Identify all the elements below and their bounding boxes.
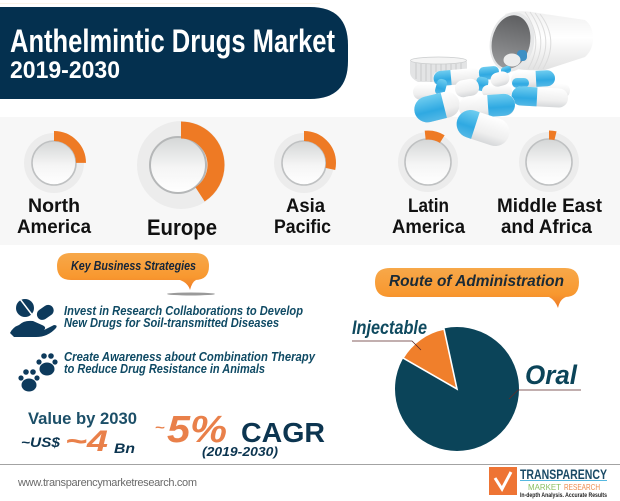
donut: Europe xyxy=(137,121,225,209)
donut: Latin America xyxy=(398,132,458,192)
label: North America: North xyxy=(28,196,80,217)
label: Injectable: Injectable xyxy=(352,318,427,339)
bottle xyxy=(484,8,593,76)
logo wordmark: MARKET xyxy=(528,482,561,492)
label: Asia Pacific xyxy=(274,196,331,238)
strategy text 2 xyxy=(64,350,316,376)
stat: value by 2030 xyxy=(21,409,137,458)
callout: Route of Administration xyxy=(375,268,579,308)
stat: value by 2030: ~4 xyxy=(65,425,108,458)
callout: Route of Administration: Route of Administration xyxy=(389,273,564,290)
strategy text 1: New Drugs for Soil-transmitted Diseases xyxy=(64,316,279,330)
logo: Transparency Market Research xyxy=(489,466,607,499)
strategy text 2: Create Awareness about Combination Therapy xyxy=(64,350,316,364)
callout: Key Business Strategies: Key Business Strategies xyxy=(71,258,196,273)
label: North America xyxy=(17,196,91,238)
capsules xyxy=(412,65,570,150)
label: Injectable xyxy=(352,318,427,350)
strategy text 1 xyxy=(64,304,303,330)
label: Asia Pacific: Pacific xyxy=(274,217,331,238)
label: North America: America xyxy=(17,217,91,238)
label: Asia Pacific: Asia xyxy=(286,196,325,217)
donut: Middle East and Africa xyxy=(519,132,579,192)
logo wordmark xyxy=(520,466,607,499)
label: Latin America: America xyxy=(392,217,465,238)
logo wordmark: RESEARCH xyxy=(564,482,600,492)
label: Oral xyxy=(509,360,581,399)
label: Middle East and Africa: and Africa xyxy=(501,217,592,238)
stat: value by 2030: ~US$ xyxy=(21,434,60,450)
pie slice: oral xyxy=(395,327,519,451)
stat: CAGR: (2019-2030) xyxy=(202,445,278,459)
stat: CAGR xyxy=(155,409,325,459)
stat: CAGR: 5% xyxy=(167,409,227,451)
logo mark xyxy=(489,467,517,495)
donut: North America xyxy=(24,133,84,193)
title banner xyxy=(0,7,348,99)
icon: hand holding pills xyxy=(10,299,57,337)
subtitle years: 2019-2030 xyxy=(10,57,120,84)
label: Middle East and Africa: Middle East xyxy=(497,196,603,217)
pie chart: route of administration xyxy=(395,327,519,451)
label: Europe: Europe xyxy=(147,215,217,240)
stat: CAGR: CAGR xyxy=(241,417,325,448)
website url: www.transparencymarketresearch.com xyxy=(17,477,197,489)
stat: CAGR: ~ xyxy=(155,420,166,435)
bottle cap xyxy=(410,57,467,82)
title text: Anthelmintic Drugs Market xyxy=(10,23,335,59)
illustration: pill bottle and capsules xyxy=(410,8,593,150)
label: Latin America xyxy=(392,196,465,238)
icon: paw prints xyxy=(18,353,58,392)
strategy text 1: Invest in Research Collaborations to Develop xyxy=(64,304,303,318)
strategy text 2: to Reduce Drug Resistance in Animals xyxy=(64,362,265,376)
stat: value by 2030: Value by 2030 xyxy=(28,409,137,428)
stat: value by 2030: Bn xyxy=(114,440,135,456)
label: Oral: Oral xyxy=(525,360,577,390)
callout: Key Business Strategies xyxy=(57,253,215,296)
label: Latin America: Latin xyxy=(408,196,449,217)
pie slice: injectable xyxy=(403,329,457,389)
label: Middle East and Africa xyxy=(497,196,603,238)
panel: regional donuts xyxy=(17,121,603,240)
donut: Asia Pacific xyxy=(274,133,334,193)
